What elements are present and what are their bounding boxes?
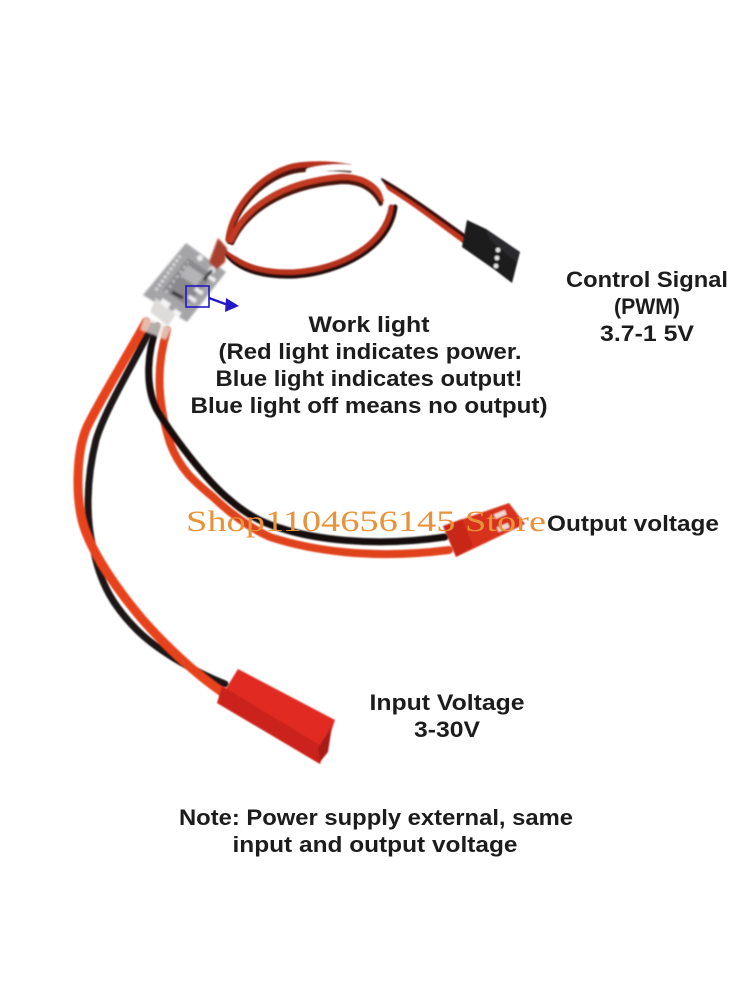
- input cable pair: [78, 322, 225, 692]
- label: input voltage: Input Voltage: [370, 690, 524, 715]
- label: work light: Work light: [308, 312, 430, 337]
- label: control signal: Control Signal: [566, 267, 728, 292]
- label: control signal: [566, 267, 728, 346]
- label: output voltage: Output voltage: [547, 511, 719, 536]
- output connector: [443, 503, 525, 557]
- work light marker and arrow: [186, 286, 239, 312]
- label: input voltage: 3-30V: [414, 717, 480, 742]
- servo connector: [462, 220, 520, 283]
- note: [179, 805, 573, 857]
- label: control signal: (PWM): [614, 294, 680, 319]
- input connector: [217, 669, 335, 764]
- label: work light: Blue light indicates output!: [216, 366, 522, 391]
- note: input and output voltage: [232, 832, 518, 857]
- label: control signal: 3.7-1 5V: [600, 321, 694, 346]
- note: Note: Power supply external, same: [179, 805, 573, 830]
- signal cable loop: [222, 164, 466, 276]
- output cable pair: [149, 326, 449, 554]
- control board: [140, 238, 227, 340]
- label: work light: (Red light indicates power.: [218, 339, 522, 364]
- label: input voltage: [370, 690, 524, 742]
- label: work light: [190, 312, 548, 418]
- label: work light: Blue light off means no output): [190, 393, 548, 418]
- watermark: Shop1104656145 Store: [186, 505, 546, 538]
